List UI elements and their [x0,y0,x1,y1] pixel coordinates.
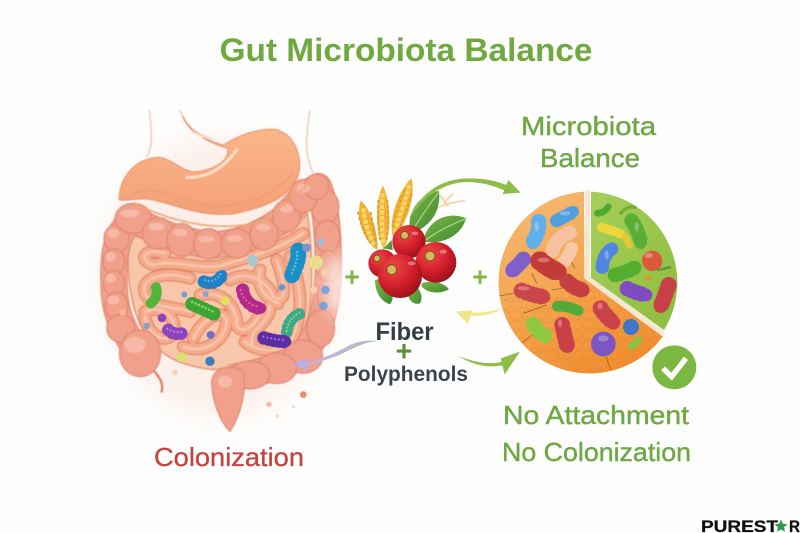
teal bacterium [287,313,299,333]
heading: Microbiota Balance [521,111,657,173]
bacteria on orange segment [512,212,638,347]
bottom curved green arrow [458,352,520,374]
green bacterium center [192,302,214,314]
top curved green arrow [408,178,521,220]
blue bacterium upper right [291,251,298,277]
cracks in orange segment [499,260,611,370]
small intestine bed [128,213,312,370]
highlights on colon [105,184,310,388]
floating microbe dots [119,239,330,418]
bacteria highlights [517,211,653,341]
label: No Attachment / No Colonization: No Attachment [503,400,690,430]
illustration: digestive system with bacteria [103,110,352,432]
faded wheat stalk [416,193,465,225]
large intestine [103,174,340,432]
green bacterium left [151,287,157,303]
esophagus and body outline [147,110,313,173]
pie chart of microbiota [499,191,696,389]
magenta bacterium [241,290,261,308]
check badge [652,345,696,389]
label: Polyphenols: Polyphenols [344,363,468,386]
label: No Attachment / No Colonization [502,400,691,467]
colon continuous base [114,187,328,378]
leaves [375,191,466,304]
heading: Microbiota Balance: Microbiota [521,111,657,141]
logo: PURESTAR [701,517,800,533]
green segment [591,192,677,330]
purple bacterium right [263,337,287,342]
purple bacterium left [167,329,183,334]
heading: Microbiota Balance: Balance [540,143,640,173]
purple arrow to gut [293,341,377,371]
green plus right: + [472,262,488,292]
green plus between labels: + [396,336,412,368]
orange segment [499,192,663,373]
logo star [775,520,787,532]
label: Colonization: Colonization [154,442,304,472]
title: Gut Microbiota Balance [220,32,592,68]
blue bacterium center [204,274,222,283]
cranberries [368,225,456,298]
illustration: wheat, leaves and cranberries [293,178,521,374]
green plus left: + [344,262,360,292]
leaf midribs [415,193,465,241]
orange line along transverse colon [133,180,317,226]
appendix [153,370,162,392]
small intestine loops [144,233,303,350]
bacteria on green segment [597,207,670,306]
stomach [119,117,300,214]
label: No Attachment / No Colonization: No Colonization [502,437,691,467]
orange cell texture [500,279,663,373]
white fade beside colon [324,255,352,318]
label: Fiber: Fiber [376,318,434,346]
cream backing [585,191,665,339]
soft pink glow [103,137,337,417]
yellow return arrow [456,309,501,324]
wheat ears [358,178,413,250]
